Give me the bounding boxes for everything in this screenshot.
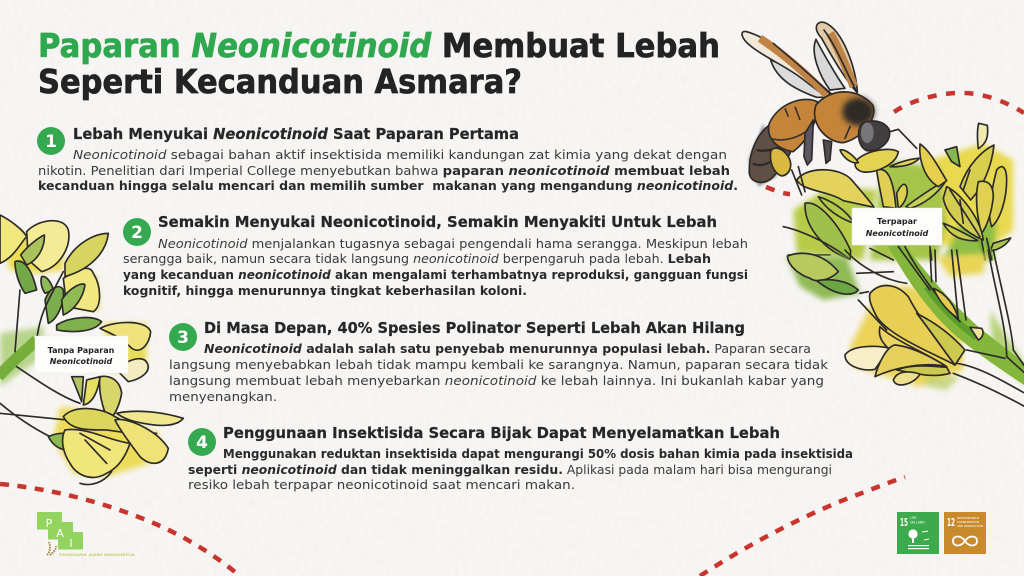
body 3 — [169, 341, 829, 404]
dashed arc: bottom left — [0, 484, 240, 576]
left petals — [0, 215, 151, 420]
leaves — [787, 250, 907, 330]
bee thorax dark fur — [842, 98, 874, 126]
dashed arc: top right lower segment — [766, 187, 790, 194]
body 4: seperti neonicotinoid dan tidak meninggalkan residu. Aplikasi pada malam hari bisa mengurangi — [188, 462, 832, 477]
section 3 — [169, 319, 829, 404]
number badge 3 — [169, 323, 197, 351]
illustration: flowers left — [0, 215, 183, 485]
number badge 2: 2 — [131, 223, 143, 243]
body 2 — [123, 236, 748, 298]
bee wings — [742, 22, 857, 107]
icon: SDG 12 responsible consumption: 12 — [947, 516, 955, 529]
label: Tanpa Paparan Neonicotinoid: Tanpa Paparan — [48, 346, 115, 355]
body 2: Neonicotinoid menjalankan tugasnya sebagai pengendali hama serangga. Meskipun lebah — [158, 236, 748, 251]
label: Terpapar Neonicotinoid: Neonicotinoid — [866, 229, 929, 238]
heading 1: Lebah Menyukai Neonicotinoid Saat Paparan Pertama — [73, 125, 519, 143]
body 2: yang kecanduan neonicotinoid akan mengalami terhambatnya reproduksi, gangguan fungsi — [123, 267, 748, 282]
icon: SDG 15 life on land: 15 — [900, 516, 908, 529]
bee abdomen — [748, 99, 817, 187]
dashed arc: top right upper — [894, 93, 1024, 113]
heading 3: Di Masa Depan, 40% Spesies Polinator Seperti Lebah Akan Hilang — [204, 319, 745, 337]
flower petals and leaves — [783, 123, 1011, 260]
body 3: langsung membuat lebah menyebarkan neonicotinoid ke lebah lainnya. Ini bukanlah kabar yang — [169, 373, 824, 388]
icon: SDG 15 life on land — [897, 512, 939, 554]
icon: SDG 12 responsible consumption — [944, 512, 986, 554]
flower cluster bottom with stem — [787, 243, 1024, 407]
flower petals — [845, 286, 983, 385]
bottom flower — [48, 409, 183, 485]
side stems — [898, 247, 1024, 407]
body 1: kecanduan hingga selalu mencari dan memilih sumber makanan yang mengandung neonicotinoid. — [38, 178, 738, 193]
body 2: kognitif, hingga menurunnya tingkat keberhasilan koloni. — [123, 283, 527, 298]
number badge 4 — [188, 428, 216, 456]
flower cluster top — [783, 123, 1013, 260]
icon: SDG 12 responsible consumption: AND PRODUCTION — [957, 524, 983, 528]
left stems — [0, 272, 80, 437]
section 4 — [188, 424, 853, 492]
body 1: nikotin. Penelitian dari Imperial College menyebutkan bahwa paparan neonicotinoid membuat lebah — [38, 163, 730, 178]
illustration: bee — [742, 22, 917, 195]
heading 2: Semakin Menyukai Neonicotinoid, Semakin Menyakiti Untuk Lebah — [158, 213, 717, 231]
icon: SDG 15 life on land: LIFE — [910, 516, 917, 520]
dashed arc: bottom right — [700, 477, 905, 576]
icon: SDG 15 life on land: ON LAND — [910, 520, 925, 524]
number badge 3: 3 — [177, 328, 189, 348]
icon: SDG 12 responsible consumption: CONSUMPTION — [957, 520, 979, 524]
body 4: Menggunakan reduktan insektisida dapat mengurangi 50% dosis bahan kimia pada insektisida — [223, 446, 853, 461]
illustration: flowers right — [783, 123, 1024, 407]
number badge 1 — [37, 127, 65, 155]
section 1 — [37, 125, 738, 193]
logo: Pandawa Agri Indonesia: PANDAWA AGRI INDONESIA — [59, 553, 135, 557]
body 3: langsung menyebabkan lebah tidak mampu kembali ke sarangnya. Namun, paparan secara tidak — [169, 357, 829, 372]
title: Paparan Neonicotinoid Membuat Lebah — [38, 27, 720, 65]
bee head — [859, 121, 890, 151]
label: Terpapar Neonicotinoid: Terpapar — [877, 217, 917, 226]
logo: Pandawa Agri Indonesia: I — [69, 537, 73, 550]
main stem — [888, 243, 1024, 387]
label: Terpapar Neonicotinoid — [852, 208, 942, 245]
body 2: serangga baik, namun secara tidak langsung neonicotinoid berpengaruh pada lebah. Lebah — [123, 251, 711, 266]
label: Tanpa Paparan Neonicotinoid: Neonicotinoid — [50, 357, 113, 366]
body 1 — [38, 147, 738, 193]
label: Tanpa Paparan Neonicotinoid — [35, 336, 128, 373]
logo: Pandawa Agri Indonesia: P — [46, 517, 53, 530]
body 1: Neonicotinoid sebagai bahan aktif insektisida memiliki kandungan zat kimia yang dekat dengan — [73, 147, 727, 162]
number badge 4: 4 — [196, 433, 208, 453]
title — [38, 27, 720, 101]
bee thorax — [815, 92, 874, 143]
number badge 1: 1 — [45, 132, 57, 152]
body 3: menyenangkan. — [169, 389, 277, 404]
number badge 2 — [123, 218, 151, 246]
stem dark wash — [927, 287, 977, 337]
body 4 — [188, 446, 853, 492]
body 3: Neonicotinoid adalah salah satu penyebab menurunnya populasi lebah. Paparan secara — [204, 341, 811, 356]
body 4: resiko lebah terpapar neonicotinoid saat mencari makan. — [188, 477, 575, 492]
icon: SDG 12 responsible consumption: RESPONSIBLE — [957, 516, 979, 520]
logo: Pandawa Agri Indonesia — [37, 512, 135, 557]
logo: Pandawa Agri Indonesia: A — [56, 527, 64, 540]
bee legs — [770, 120, 917, 195]
title: Seperti Kecanduan Asmara? — [38, 63, 522, 101]
heading 4: Penggunaan Insektisida Secara Bijak Dapat Menyelamatkan Lebah — [223, 424, 780, 442]
section 2 — [123, 213, 748, 298]
